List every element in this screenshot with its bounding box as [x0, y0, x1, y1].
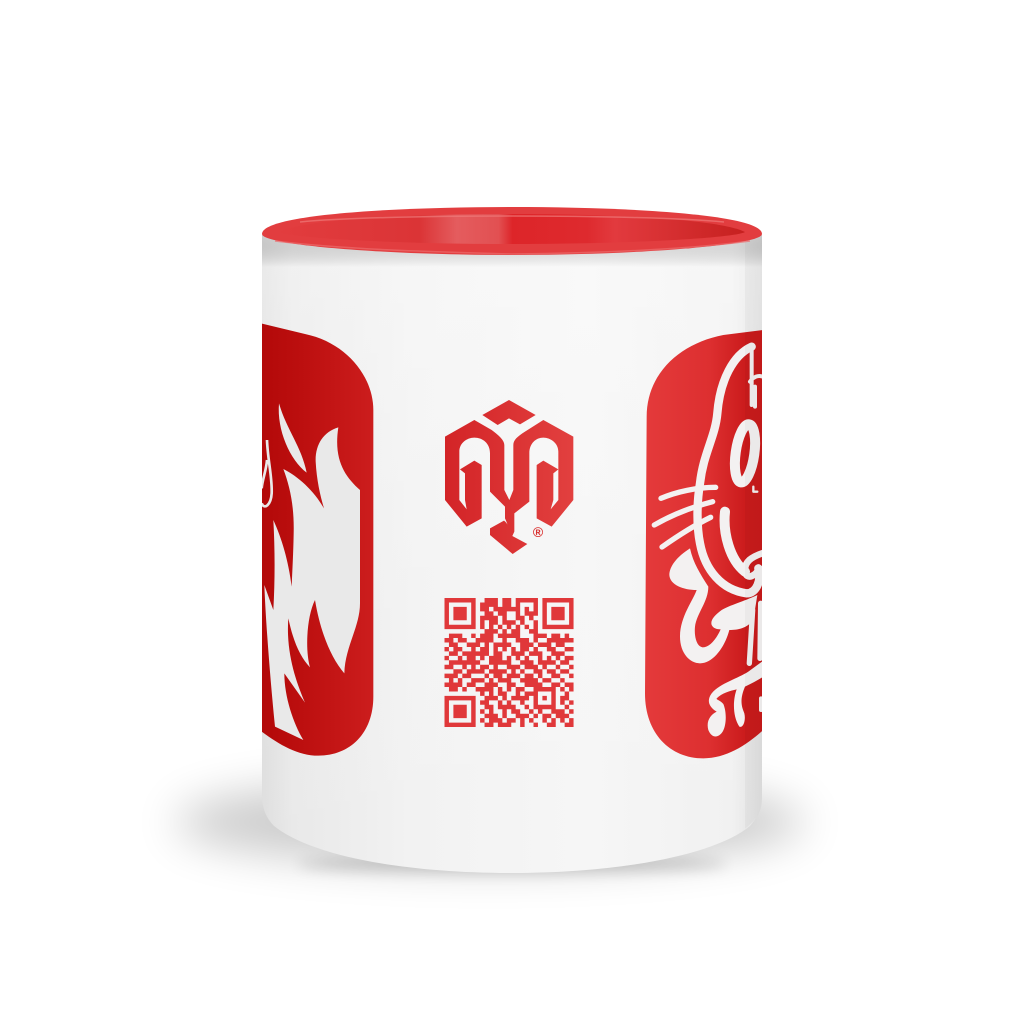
icon: cat outline — [654, 347, 764, 593]
panel: left flame — [255, 322, 373, 756]
icon: small flame tip — [279, 403, 307, 473]
panel: right cat — [645, 330, 764, 758]
mug rim — [262, 207, 762, 255]
logo: top diamond — [482, 400, 536, 425]
right edge fade — [745, 235, 762, 875]
icon: cat paw — [669, 548, 763, 736]
shadow under mug — [175, 778, 805, 872]
icon: droplet outline — [262, 440, 272, 506]
qr code — [444, 600, 574, 725]
mug interior — [280, 214, 745, 244]
logo — [445, 400, 573, 554]
mug illustration — [170, 207, 810, 886]
mug body — [262, 235, 762, 873]
icon: cat legs — [749, 603, 761, 663]
registered mark: ® — [533, 524, 544, 540]
icon: main flame — [264, 427, 360, 740]
logo: monogram — [445, 420, 573, 554]
icon: cat foot — [708, 661, 763, 736]
